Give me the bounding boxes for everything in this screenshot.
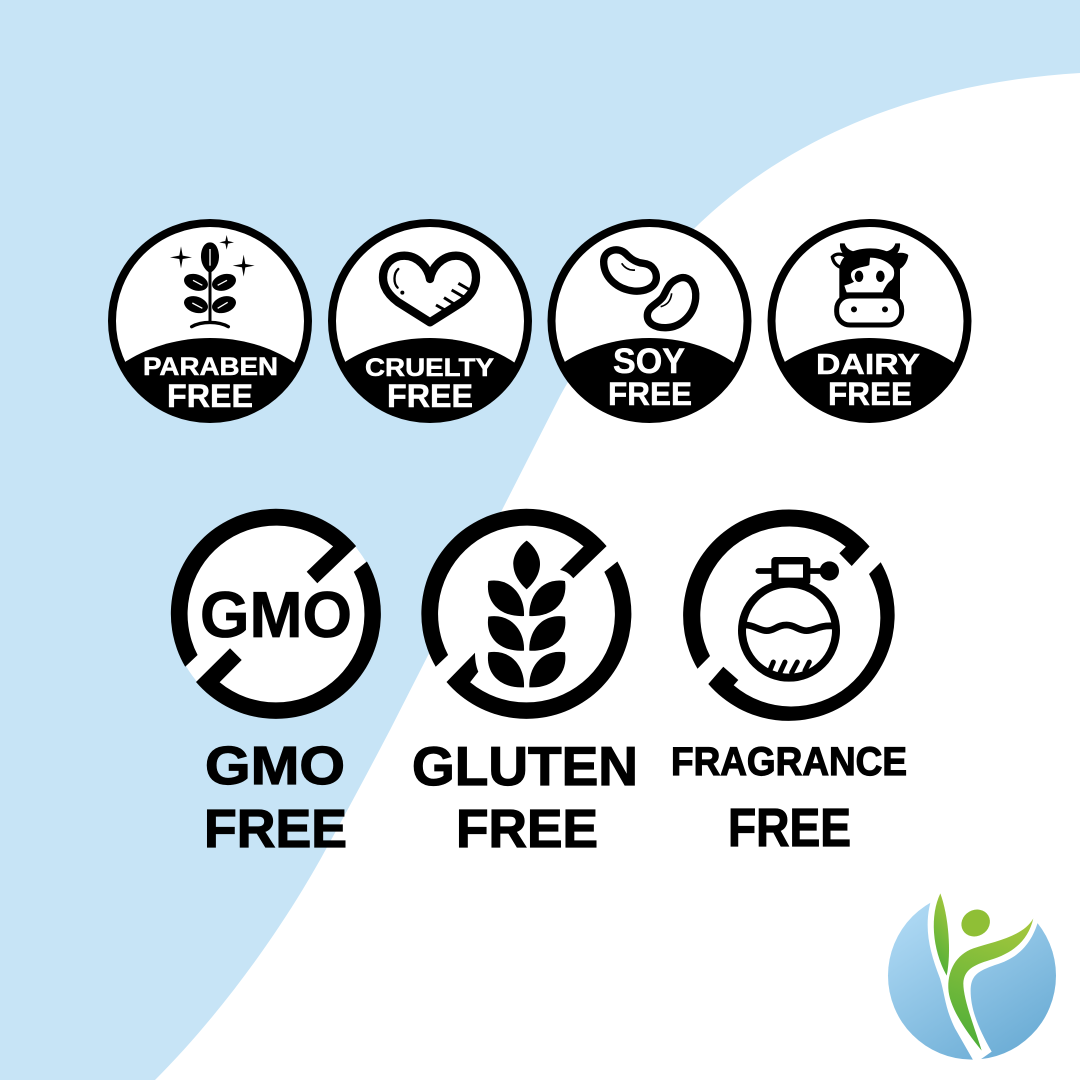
label: dairy free text: [816, 349, 920, 412]
logo: blue disc with green figure: [888, 885, 1056, 1063]
icon: perfume bottle: [742, 561, 839, 678]
icon: soy beans: [604, 250, 696, 328]
label: cruelty free text: FREE: [387, 378, 473, 414]
icon: wheat: [488, 541, 565, 687]
icon: plant with sparkles: [170, 235, 255, 327]
label: fragrance free: [671, 740, 907, 858]
badge: cruelty free: [332, 223, 528, 421]
badge: dairy free: [772, 223, 968, 421]
label: dairy free text: DAIRY: [816, 349, 920, 381]
label: cruelty free text: CRUELTY: [365, 354, 494, 382]
label: paraben free text: FREE: [167, 378, 253, 414]
label: soy free text: FREE: [608, 376, 692, 412]
label: fragrance free: FRAGRANCE: [671, 740, 907, 784]
text: GMO in icon: GMO: [200, 578, 352, 651]
label: GMO free: GMO: [205, 736, 345, 796]
label: soy free text: [608, 342, 692, 412]
label: dairy free text: FREE: [828, 376, 912, 412]
label: GMO free: [204, 736, 347, 859]
label: soy free text: SOY: [613, 342, 685, 381]
logo: green head: [956, 904, 995, 942]
icon: cow face: [832, 243, 908, 325]
icon: heart: [383, 256, 476, 322]
label: paraben free text: PARABEN: [143, 353, 278, 381]
badge: paraben free: [112, 223, 308, 421]
label: GMO free: FREE: [204, 799, 347, 859]
logo: green leaf: [934, 893, 949, 976]
badge: gluten free icon: [421, 509, 631, 719]
label: gluten free: GLUTEN: [412, 735, 638, 797]
badge: GMO free icon: [171, 509, 381, 719]
label: cruelty free text: [365, 354, 494, 414]
label: fragrance free: FREE: [728, 798, 851, 858]
badge: fragrance free icon: [683, 509, 895, 721]
logo: green body: [948, 918, 1033, 1051]
label: gluten free: FREE: [456, 799, 598, 859]
badge: soy free: [552, 223, 748, 421]
label: paraben free text: [143, 353, 278, 414]
label: gluten free: [412, 735, 638, 859]
